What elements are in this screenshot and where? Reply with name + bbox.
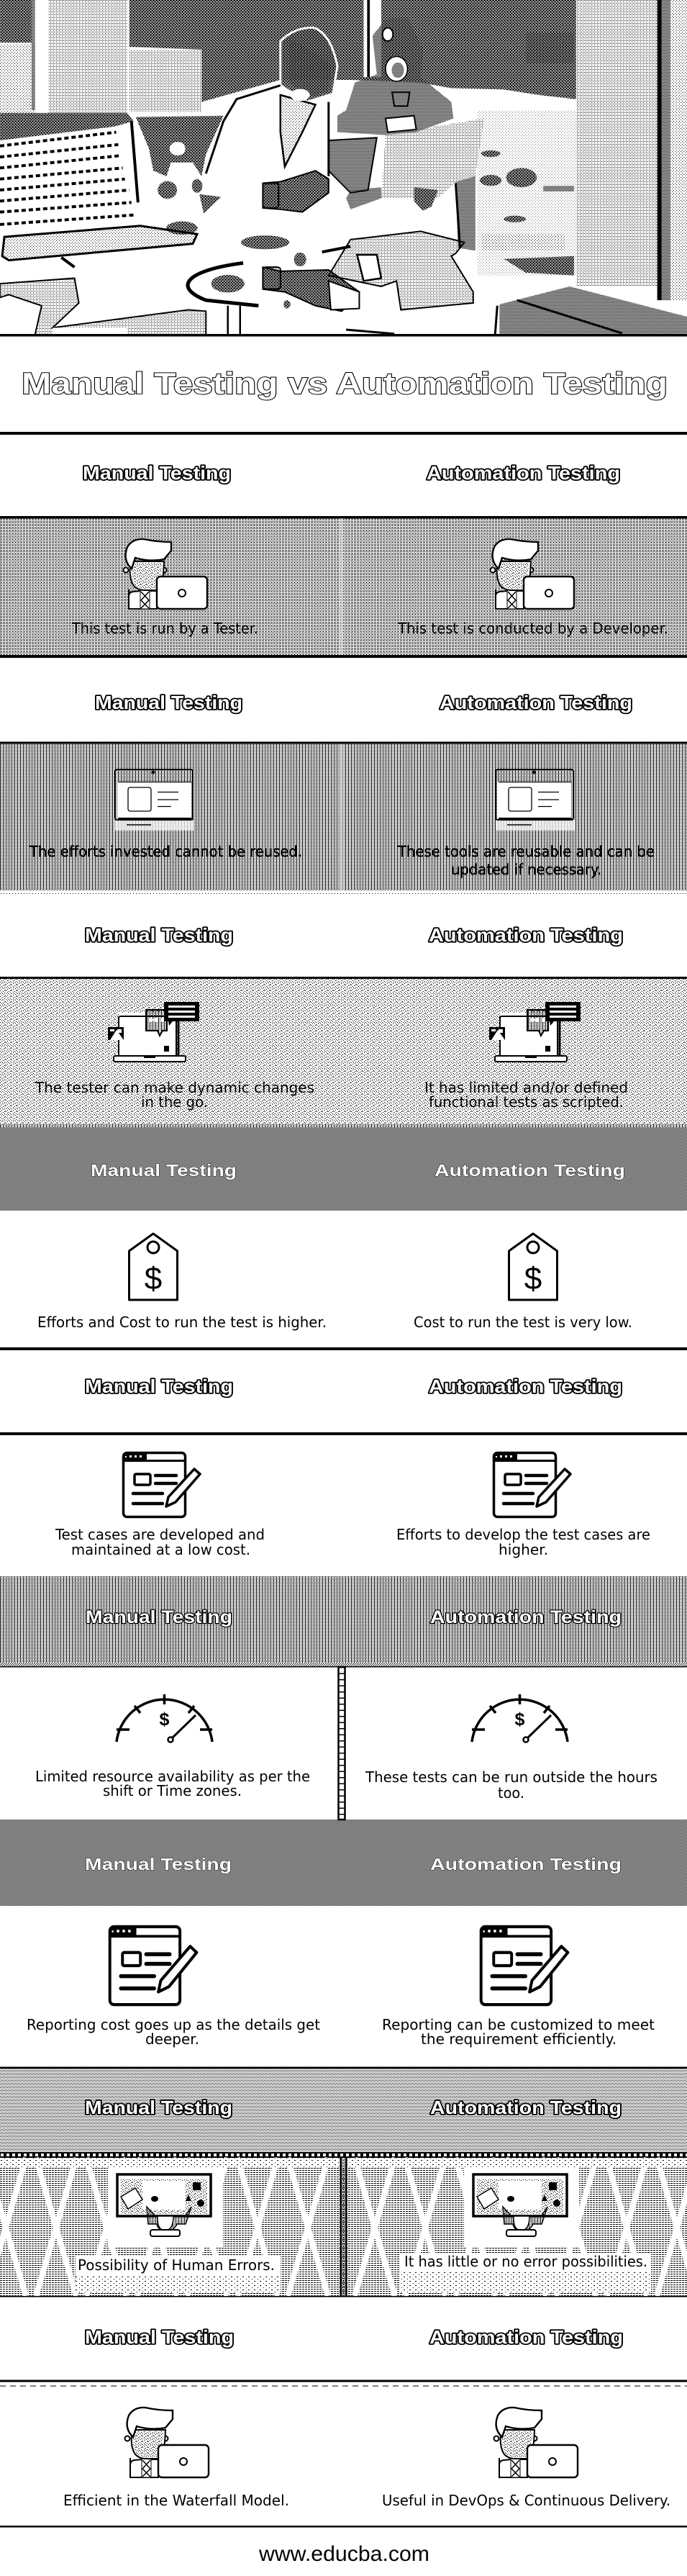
- heading: manual: Manual Testing: [85, 2097, 232, 2118]
- row 5 panel: [55, 1452, 650, 1558]
- row 3 panel: [0, 977, 687, 1128]
- row 2 heading band: [95, 692, 632, 713]
- panel background: [0, 516, 687, 658]
- band background: [0, 1576, 687, 1663]
- icon: monitor: [473, 2174, 567, 2236]
- icon: document and pencil: [123, 1452, 200, 1517]
- text: automation: These tools are reusable and can be: [397, 843, 655, 860]
- icon: window: [115, 769, 194, 831]
- icon: window: [496, 769, 575, 831]
- icon: gauge: [472, 1694, 568, 1742]
- text: automation: the requirement efficiently.: [421, 2030, 617, 2048]
- heading: automation: Automation Testing: [429, 924, 623, 946]
- icon: monitor: [117, 2174, 211, 2236]
- text: manual: The efforts invested cannot be reused.: [29, 843, 302, 860]
- icon: price tag: [509, 1234, 557, 1300]
- row 5 heading band: [85, 1375, 622, 1397]
- text: manual: The tester can make dynamic changes: [35, 1079, 314, 1096]
- rule: [0, 2526, 687, 2528]
- text: automation: [382, 2016, 655, 2048]
- row 4 heading band: [0, 1128, 687, 1211]
- icon: price tag: $: [145, 1261, 162, 1296]
- text: manual: [27, 2016, 320, 2048]
- icon: document and pencil: [481, 1926, 568, 2005]
- heading: manual: Manual Testing: [85, 2326, 234, 2348]
- heading: manual: Manual Testing: [85, 1375, 233, 1397]
- icon: price tag: $: [524, 1261, 542, 1296]
- heading: automation: Automation Testing: [429, 2326, 623, 2348]
- text: automation: functional tests as scripted.: [429, 1093, 624, 1111]
- hero photo: two colleagues reviewing a paper: [0, 0, 687, 335]
- footer url: www.educba.com: [258, 2542, 429, 2566]
- heading: manual: Manual Testing: [86, 1607, 232, 1627]
- hero bottom rule: [0, 334, 687, 337]
- icon: gauge: [117, 1694, 212, 1742]
- rule: [0, 1347, 687, 1350]
- panel background: [0, 742, 687, 890]
- band background: [0, 2069, 687, 2152]
- row 1 heading band: [83, 462, 620, 484]
- icon: gauge: $: [515, 1709, 525, 1730]
- text: automation: Cost to run the test is very low.: [414, 1314, 632, 1331]
- text: manual: [35, 1768, 310, 1799]
- heading: manual: Manual Testing: [85, 924, 233, 946]
- text: manual: [55, 1526, 265, 1558]
- text: manual: Limited resource availability as per the: [35, 1768, 310, 1785]
- row 7 panel: [27, 1926, 655, 2048]
- text: automation: These tests can be run outside the hours: [365, 1768, 658, 1786]
- rule: [0, 432, 687, 435]
- panel background: [0, 979, 687, 1124]
- row 9 heading band: [85, 2326, 623, 2348]
- icon: developer at laptop: [491, 539, 574, 609]
- text: automation: [396, 1526, 650, 1558]
- row 2 panel: [0, 741, 687, 894]
- band background: [0, 1820, 687, 1906]
- rule: [0, 1432, 687, 1435]
- row 6 heading band: [0, 1576, 687, 1667]
- row 6 panel: [35, 1667, 658, 1820]
- text: manual: Reporting cost goes up as the details get: [27, 2016, 320, 2033]
- text: manual: Efforts and Cost to run the test is higher.: [37, 1314, 327, 1331]
- text: manual: Test cases are developed and: [55, 1526, 265, 1543]
- row 3 heading band: [85, 924, 623, 946]
- text: manual: shift or Time zones.: [103, 1782, 242, 1799]
- heading: automation: Automation Testing: [427, 462, 620, 484]
- rule: [0, 2380, 687, 2382]
- row 8 heading band: [0, 2067, 687, 2158]
- heading: manual: Manual Testing: [83, 462, 231, 484]
- text: manual: Possibility of Human Errors.: [78, 2256, 275, 2274]
- panel background with zigzag: [0, 2158, 687, 2296]
- heading: automation: Automation Testing: [430, 1855, 622, 1874]
- title: Manual Testing vs Automation Testing: [22, 366, 668, 400]
- row 8 panel: [0, 2158, 687, 2296]
- band background: [0, 1128, 687, 1211]
- icon: tester at laptop: [125, 2408, 209, 2477]
- heading: automation: Automation Testing: [435, 1161, 625, 1180]
- text: automation: [397, 843, 655, 878]
- rule: [0, 2296, 687, 2297]
- heading: manual: Manual Testing: [85, 1855, 232, 1874]
- text: automation: It has little or no error possibilities.: [404, 2253, 647, 2270]
- text: manual: deeper.: [145, 2030, 199, 2048]
- heading: automation: Automation Testing: [440, 692, 632, 713]
- chain divider: [338, 1667, 345, 1820]
- heading: manual: Manual Testing: [95, 692, 242, 713]
- icon: document and pencil: [493, 1452, 570, 1517]
- text: automation: Reporting can be customized to meet: [382, 2016, 655, 2033]
- icon: developer at laptop: [493, 2408, 578, 2477]
- text: automation: updated if necessary.: [451, 861, 601, 878]
- icon: document and pencil: [109, 1926, 196, 2005]
- heading: manual: Manual Testing: [91, 1161, 237, 1180]
- icon: gauge: $: [160, 1709, 170, 1730]
- icon: laptop with chat bubbles: [108, 1002, 199, 1062]
- text: automation: [424, 1079, 628, 1111]
- icon: tester at laptop: [124, 539, 207, 609]
- text: manual: in the go.: [141, 1093, 208, 1111]
- heading: automation: Automation Testing: [430, 1607, 622, 1627]
- text: automation: [365, 1768, 658, 1802]
- text: automation: Useful in DevOps & Continuous Delivery.: [382, 2492, 670, 2509]
- icon: laptop with chat bubbles: [489, 1002, 581, 1062]
- heading: automation: Automation Testing: [429, 1375, 622, 1397]
- row 1 panel: [0, 516, 687, 658]
- text: automation: Efforts to develop the test cases are: [396, 1526, 650, 1543]
- row 7 heading band: [0, 1820, 687, 1906]
- row 9 panel: [63, 2408, 670, 2509]
- text: manual: Efficient in the Waterfall Model.: [63, 2492, 289, 2509]
- text: manual: [35, 1079, 314, 1111]
- heading: automation: Automation Testing: [430, 2097, 622, 2118]
- text: automation: It has limited and/or defined: [424, 1079, 628, 1096]
- text: manual: maintained at a low cost.: [71, 1541, 250, 1558]
- text: automation: This test is conducted by a Developer.: [397, 620, 668, 637]
- row 4 panel: [37, 1234, 632, 1331]
- text: automation: too.: [498, 1784, 524, 1802]
- text: manual: This test is run by a Tester.: [71, 620, 258, 637]
- text: automation: higher.: [499, 1541, 548, 1558]
- icon: price tag: [129, 1234, 177, 1300]
